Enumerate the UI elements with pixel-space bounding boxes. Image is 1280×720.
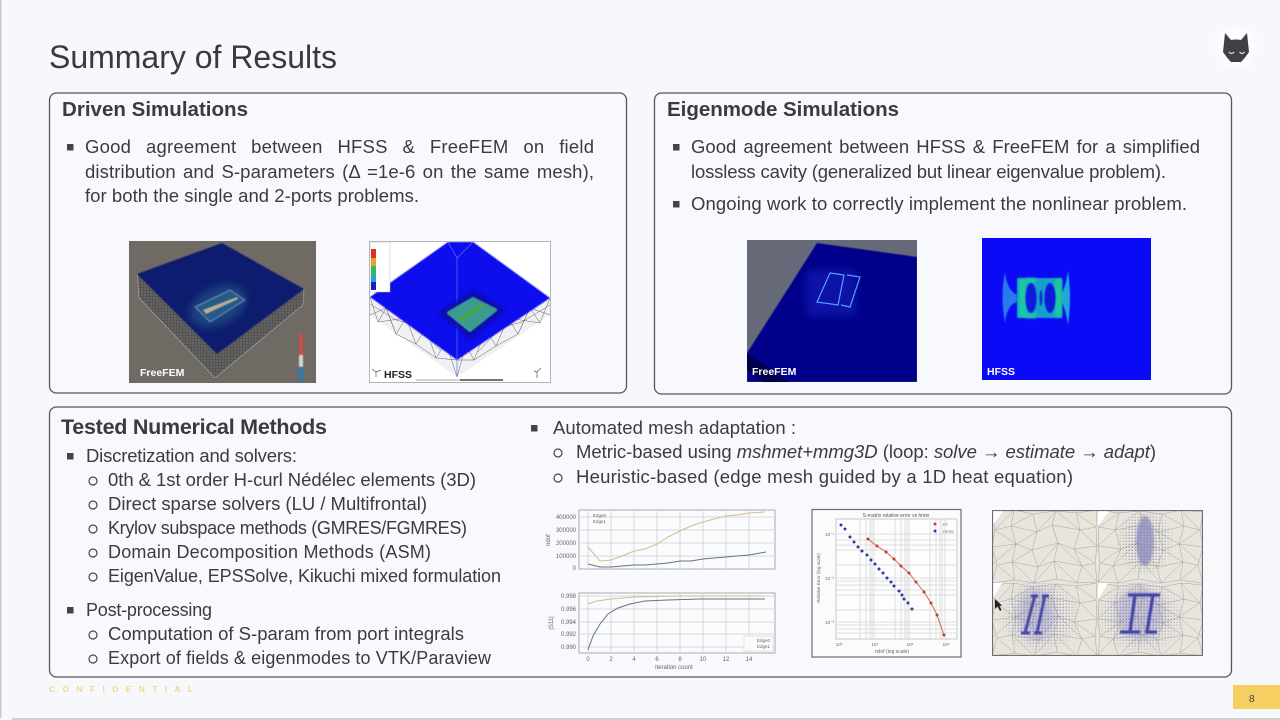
list: automated mesh adaptation: Metric-based using mshmet+mmg3D (loop: solve → estimate → adapt) xyxy=(576,441,1156,462)
chart: ndof vs iteration: 400000 xyxy=(556,515,577,521)
chart: S11 vs iteration: 10 xyxy=(700,657,707,663)
label: FreeFEM: FreeFEM xyxy=(140,367,185,379)
list: post-processing: Export of fields & eigenmodes to VTK/Paraview xyxy=(108,648,492,668)
chart: ndof vs iteration: 0 xyxy=(573,566,577,572)
list: automated mesh adaptation: Heuristic-based (edge mesh guided by a 1D heat equation) xyxy=(576,466,1073,487)
icon: mouse cursor xyxy=(995,599,1002,611)
chart: ndof vs iteration: 100000 xyxy=(556,554,577,560)
chart: S-matrix relative error vs hmin: FF xyxy=(943,522,948,527)
list: discretization and solvers: Krylov subspace methods (GMRES/FGMRES) xyxy=(108,518,467,538)
chart: S-matrix relative error vs hmin: S-matrix relative error vs hmin xyxy=(863,513,930,519)
chart: S11 vs iteration: 2 xyxy=(609,657,613,663)
chart: S-matrix relative error vs hmin: 10⁴ xyxy=(872,642,879,647)
list: discretization and solvers: Direct sparse solvers (LU / Multifrontal) xyxy=(108,493,427,514)
heading: driven simulations: Driven Simulations xyxy=(62,98,248,121)
chart: ndof vs iteration: Edge0 xyxy=(593,513,607,518)
chart: S11 vs iteration: 4 xyxy=(632,657,636,663)
list: automated mesh adaptation: Automated mesh adaptation : xyxy=(553,417,796,438)
list: discretization and solvers: Discretization and solvers: xyxy=(86,445,297,466)
panel: driven simulations xyxy=(50,93,626,393)
list: post-processing: Post-processing xyxy=(86,600,212,620)
list: automated mesh adaptation xyxy=(531,417,1156,487)
page number: 8 xyxy=(1249,694,1255,705)
chart: S11 vs iteration: 8 xyxy=(678,657,682,663)
title: Summary of Results xyxy=(49,39,337,75)
panel: tested numerical methods xyxy=(50,407,1232,677)
chart: S11 vs iteration: Edge0 xyxy=(757,638,771,643)
chart: S11 vs iteration: iteration count xyxy=(655,665,693,671)
chart: S-matrix relative error vs hmin: 10³ xyxy=(836,642,843,647)
chart: S11 vs iteration: 0.996 xyxy=(561,607,577,613)
bullet text: ongoing work: Ongoing work to correctly implement the nonlinear problem. xyxy=(691,193,1187,214)
bullet text: eigenmode agreement xyxy=(673,136,1200,182)
list: discretization and solvers: EigenValue, EPSSolve, Kikuchi mixed formulation xyxy=(108,566,501,586)
bullet text: driven agreement: for both the single and 2-ports problems. xyxy=(85,185,419,206)
image: FreeFEM driven simulation xyxy=(129,241,316,383)
bullet text: driven agreement xyxy=(67,136,594,206)
list: post-processing xyxy=(67,600,492,668)
chart: S-matrix relative error vs hmin xyxy=(812,510,961,657)
chart: S11 vs iteration: 12 xyxy=(723,657,730,663)
chart: S11 vs iteration xyxy=(549,593,775,671)
chart: S11 vs iteration: 6 xyxy=(655,657,659,663)
icon: cat logo xyxy=(1216,27,1256,67)
chart: S-matrix relative error vs hmin: ndof (log scale) xyxy=(875,649,909,655)
chart: ndof vs iteration: 300000 xyxy=(556,528,577,534)
chart: S-matrix relative error vs hmin: Relative Error (log scale) xyxy=(816,553,821,603)
footer: confidential: CONFIDENTIAL xyxy=(49,684,200,694)
chart: S11 vs iteration: 0 xyxy=(586,657,590,663)
chart: S-matrix relative error vs hmin: 10⁻³ xyxy=(825,620,834,625)
list: post-processing: Computation of S-param from port integrals xyxy=(108,623,464,644)
chart: S-matrix relative error vs hmin: 10⁵ xyxy=(907,642,914,647)
chart: S-matrix relative error vs hmin: 10⁻² xyxy=(825,576,834,581)
panel: eigenmode simulations xyxy=(654,93,1232,394)
image: FreeFEM eigenmode xyxy=(747,240,917,382)
chart: S-matrix relative error vs hmin: HFSS xyxy=(943,529,954,534)
label: HFSS: HFSS xyxy=(384,369,412,381)
chart: S-matrix relative error vs hmin: 10⁶ xyxy=(943,642,950,647)
image: HFSS driven simulation xyxy=(369,241,551,383)
chart: ndof vs iteration: Edge1 xyxy=(593,519,607,524)
list: discretization and solvers xyxy=(67,445,501,586)
list: discretization and solvers: Domain Decomposition Methods (ASM) xyxy=(108,542,431,562)
label: FreeFEM: FreeFEM xyxy=(752,366,797,378)
chart: ndof vs iteration xyxy=(546,510,775,572)
chart: S11 vs iteration: Edge1 xyxy=(757,644,771,649)
bullet text: driven agreement: distribution and S-parameters (Δ =1e-6 on the same mesh), xyxy=(85,161,594,182)
bullet text: eigenmode agreement: Good agreement between HFSS & FreeFEM for a simplified xyxy=(691,136,1200,157)
list: discretization and solvers: 0th & 1st order H-curl Nédélec elements (3D) xyxy=(108,469,476,490)
image: HFSS eigenmode xyxy=(982,238,1151,380)
bullet text: eigenmode agreement: lossless cavity (generalized but linear eigenvalue problem). xyxy=(691,161,1166,182)
page number xyxy=(1233,685,1280,709)
heading: eigenmode simulations: Eigenmode Simulations xyxy=(667,98,899,121)
chart: S11 vs iteration: 14 xyxy=(746,657,753,663)
chart: ndof vs iteration: ndof xyxy=(546,534,552,546)
bullet text: driven agreement: Good agreement between HFSS & FreeFEM on field xyxy=(85,136,594,157)
chart: S11 vs iteration: 0.990 xyxy=(561,645,577,651)
chart: S11 vs iteration: 0.998 xyxy=(561,594,577,600)
heading: tested numerical methods: Tested Numerical Methods xyxy=(61,415,327,439)
label: HFSS: HFSS xyxy=(987,366,1015,378)
chart: S-matrix relative error vs hmin: 10⁻¹ xyxy=(825,532,834,537)
chart: ndof vs iteration: 200000 xyxy=(556,541,577,547)
chart: S11 vs iteration: 0.992 xyxy=(561,632,577,638)
image: adapted mesh sequence xyxy=(992,510,1203,656)
chart: S11 vs iteration: |S11| xyxy=(549,616,555,630)
chart: S11 vs iteration: 0.994 xyxy=(561,620,577,626)
